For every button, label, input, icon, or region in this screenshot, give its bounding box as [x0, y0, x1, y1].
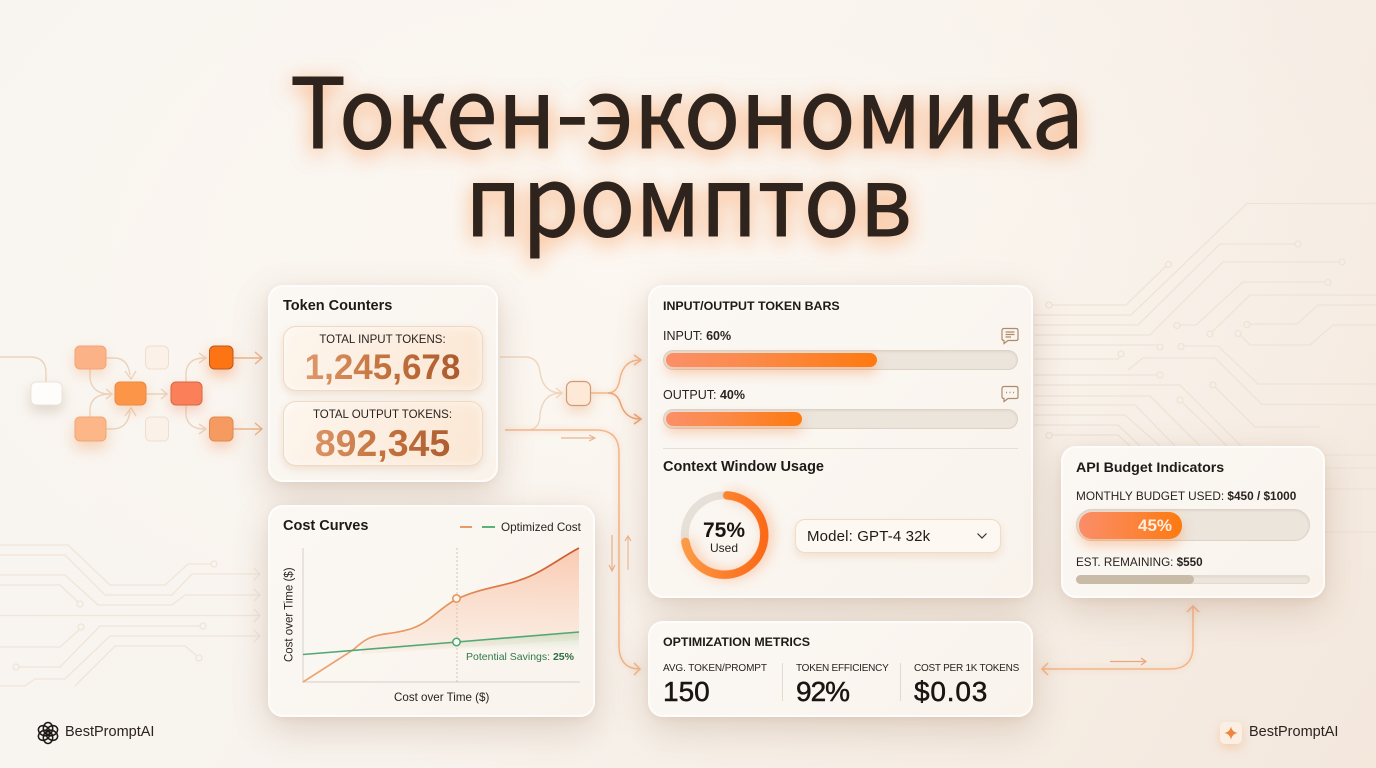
icon: knot — [38, 722, 58, 744]
panel: token counters — [268, 285, 498, 482]
estimated remaining label: EST. REMAINING: $550 — [1076, 556, 1203, 569]
counter: total input tokens: 1,245,678 — [305, 348, 460, 387]
counter: total output tokens: TOTAL OUTPUT TOKENS: — [313, 409, 452, 421]
remaining fill — [1076, 575, 1194, 584]
panel: API budget indicators — [1061, 446, 1325, 598]
metric: token efficiency — [796, 663, 888, 707]
line chart — [302, 547, 580, 683]
metric: cost per 1k tokens: $0.03 — [914, 676, 988, 707]
metric: token efficiency: 92% — [796, 676, 849, 707]
heading: Token Counters — [283, 298, 392, 314]
counter: total input tokens — [283, 326, 483, 391]
icon: dotted chat bubble — [1001, 386, 1019, 403]
panel: input/output token bars and context window — [648, 285, 1033, 598]
monthly budget bar — [1076, 509, 1310, 541]
budget fill 45% — [1079, 512, 1182, 539]
metric: cost per 1k tokens — [914, 663, 1019, 707]
y axis label: Cost over Time ($) — [283, 567, 295, 662]
logo: BestPromptAI left — [38, 722, 154, 744]
input bar — [663, 350, 1018, 370]
metric: average tokens per prompt: AVG. TOKEN/PROMPT — [663, 663, 767, 674]
counter: total output tokens: 892,345 — [315, 422, 450, 464]
heading: API Budget Indicators — [1076, 460, 1224, 476]
heading: OPTIMIZATION METRICS — [663, 635, 810, 649]
counter: total output tokens — [283, 401, 483, 466]
icon: spark tile — [1216, 722, 1246, 752]
logo: BestPromptAI right — [1216, 722, 1338, 752]
donut: 75% used: Used — [710, 541, 738, 555]
monthly budget label: MONTHLY BUDGET USED: $450 / $1000 — [1076, 489, 1296, 503]
title: промптов — [465, 123, 912, 264]
metric: token efficiency: TOKEN EFFICIENCY — [796, 663, 888, 674]
heading: Cost Curves — [283, 518, 368, 534]
panel: cost curves — [268, 505, 595, 717]
remaining bar — [1076, 575, 1310, 584]
input label: INPUT: 60% — [663, 329, 731, 343]
output label: OUTPUT: 40% — [663, 388, 745, 402]
output fill 40% — [666, 412, 802, 426]
metric: cost per 1k tokens: COST PER 1K TOKENS — [914, 663, 1019, 674]
icon: text chat bubble — [1001, 328, 1019, 345]
metric: average tokens per prompt — [663, 663, 767, 707]
x axis label: Cost over Time ($) — [394, 691, 489, 704]
title: Токен-экономика — [290, 35, 1084, 176]
panel: optimization metrics — [648, 621, 1033, 717]
heading: context window usage: Context Window Usage — [663, 459, 824, 475]
output bar — [663, 409, 1018, 429]
flow diagram: token nodes — [0, 343, 263, 456]
wordmark: BestPromptAI — [1249, 724, 1338, 740]
counter: total input tokens: TOTAL INPUT TOKENS: — [319, 334, 446, 346]
budget fill 45%: 45% — [1138, 516, 1172, 535]
heading: INPUT/OUTPUT TOKEN BARS — [663, 299, 840, 313]
donut: 75% used: 75% — [703, 519, 745, 542]
donut: 75% used — [680, 486, 779, 586]
legend: Optimized Cost — [501, 521, 581, 534]
dropdown: model selector — [795, 519, 1001, 553]
metric: average tokens per prompt: 150 — [663, 676, 710, 707]
dropdown: model selector: Model: GPT-4 32k — [807, 528, 930, 545]
input fill 60% — [666, 353, 877, 367]
title — [284, 35, 1092, 272]
line chart: Potential Savings: 25% — [466, 651, 575, 663]
wordmark: BestPromptAI — [65, 724, 154, 740]
